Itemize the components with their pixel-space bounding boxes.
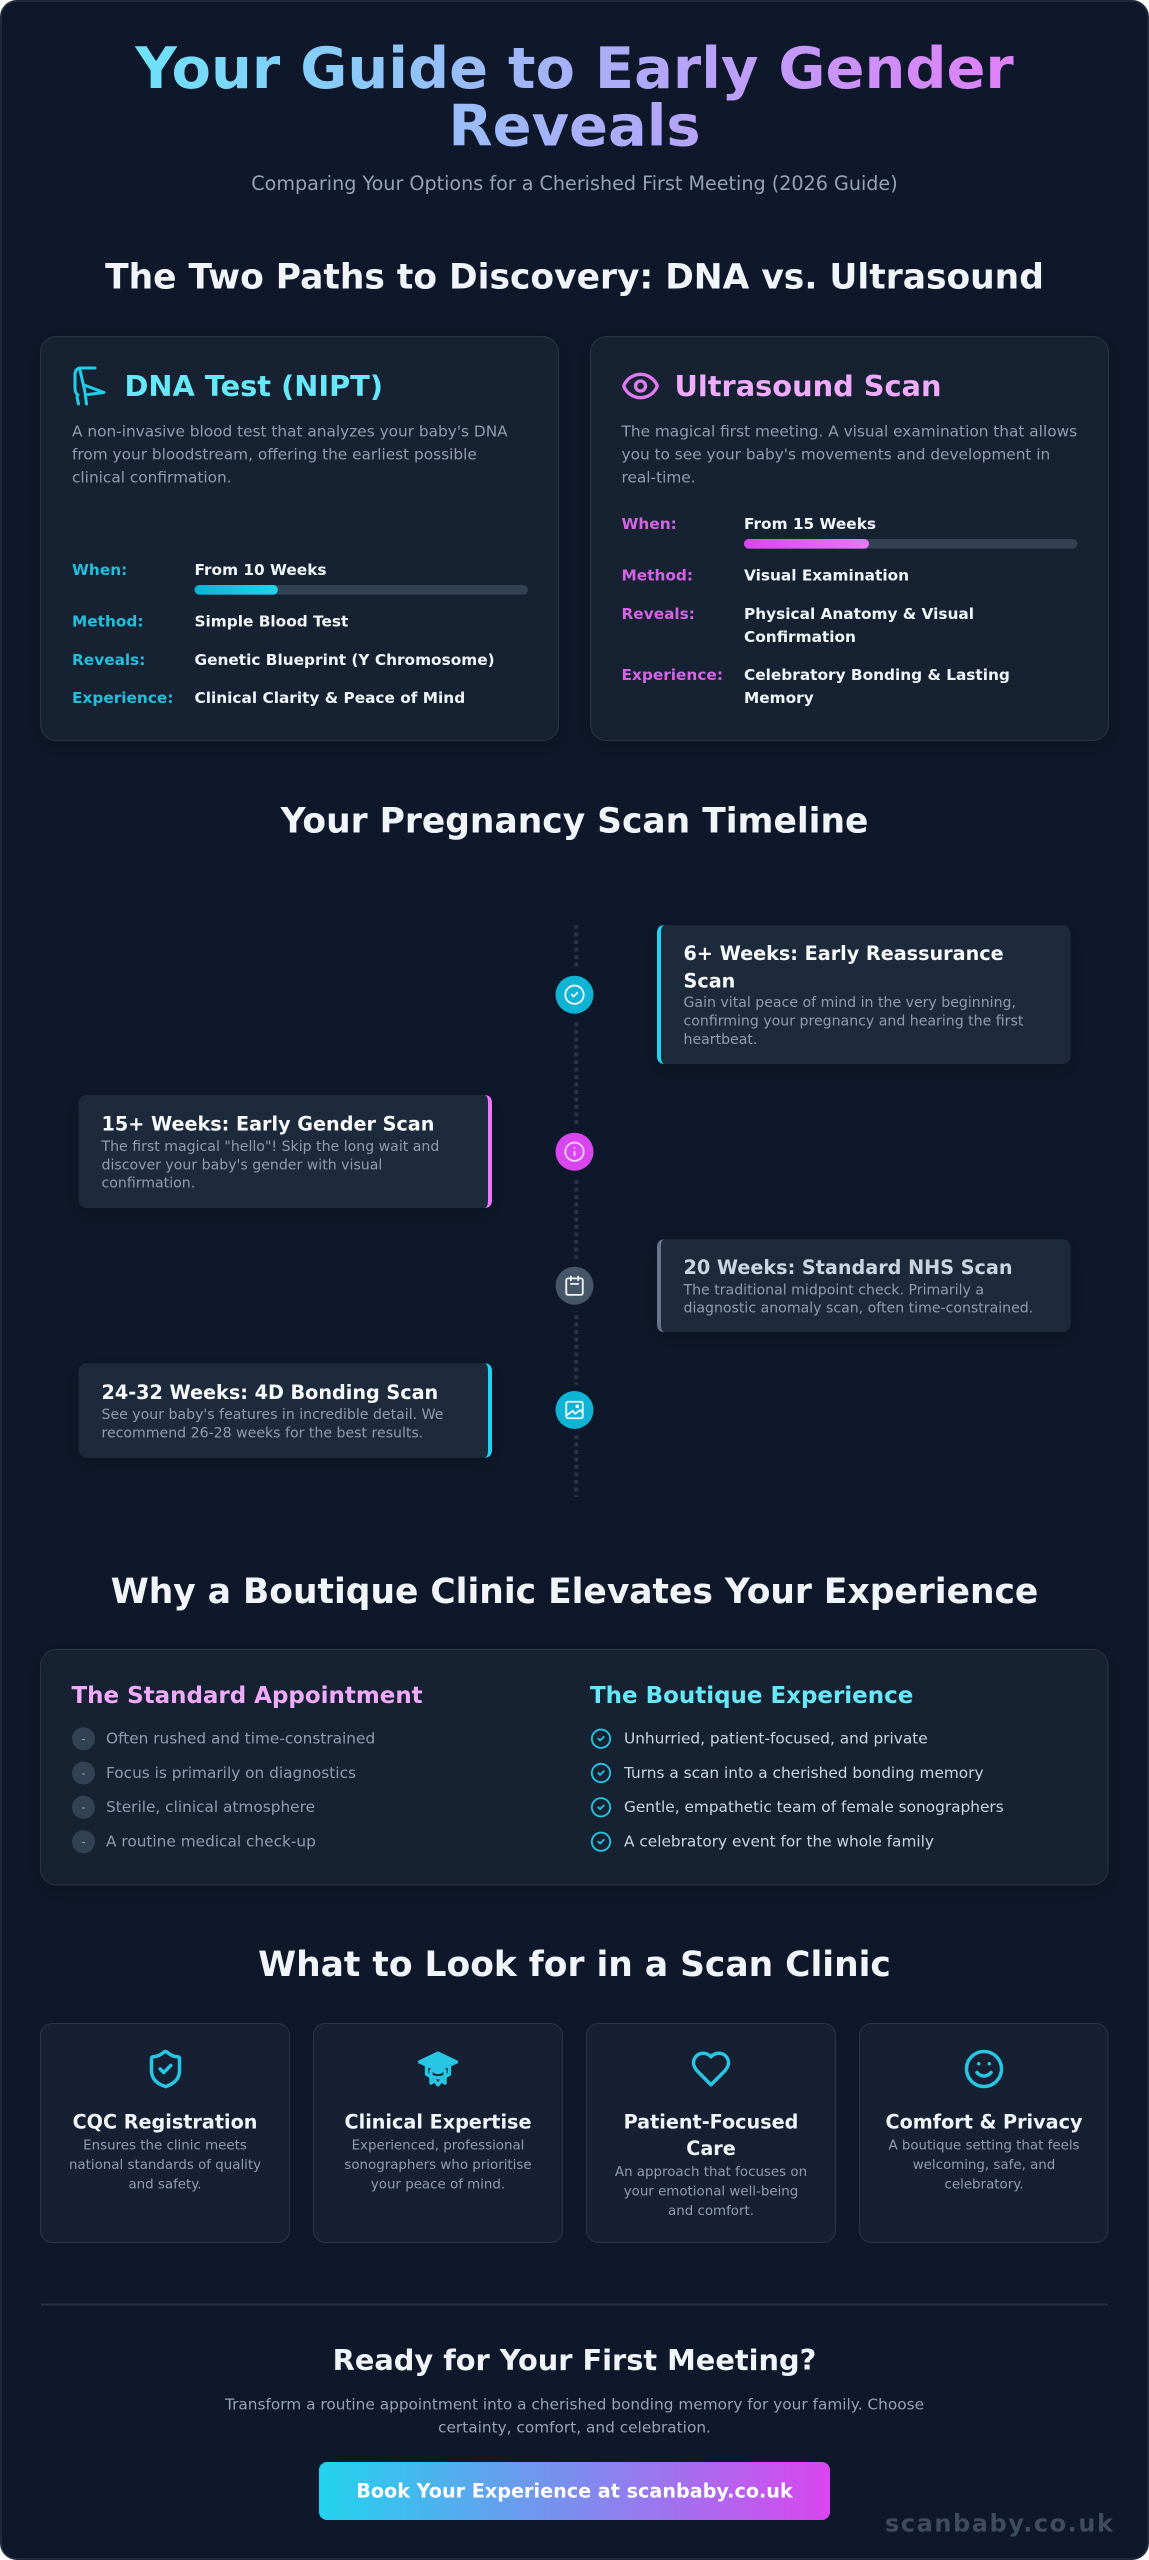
heading: boutique: Why a Boutique Clinic Elevates Your Experience — [111, 1572, 1038, 1612]
row: reveals: Reveals: — [72, 651, 145, 669]
description: from your bloodstream, offering the earliest possible — [72, 446, 477, 464]
heading: timeline: Your Pregnancy Scan Timeline — [280, 802, 868, 842]
card: clinical expertise: Clinical Expertise — [345, 2110, 531, 2133]
column: standard appointment: - — [81, 1835, 86, 1849]
description: you to see your baby's movements and development in — [622, 446, 1050, 464]
timeline axis — [574, 925, 578, 1497]
card: 6 weeks: Scan — [684, 969, 735, 992]
description: The magical first meeting. A visual examination that allows — [620, 423, 1077, 441]
row: experience — [72, 689, 465, 707]
CTA button: Book Your Experience at scanbaby.co.uk — [356, 2480, 794, 2503]
card: 4D: recommend 26-28 weeks for the best results. — [102, 1425, 423, 1441]
card: clinical expertise: sonographers who prioritise — [344, 2158, 532, 2173]
call to action — [224, 2343, 924, 2520]
row: experience: Experience: — [72, 689, 173, 707]
card: 15 weeks: 15+ Weeks: Early Gender Scan — [102, 1113, 434, 1136]
column: boutique experience — [590, 1683, 1004, 1851]
row: reveals: Physical Anatomy & Visual — [744, 605, 974, 623]
icon: smile — [966, 2052, 1002, 2086]
column: standard appointment: Sterile, clinical atmosphere — [106, 1798, 315, 1816]
card: 15 weeks: The first magical "hello"! Skip the long wait and — [100, 1139, 439, 1155]
heading: two paths: The Two Paths to Discovery: DNA vs. Ultrasound — [105, 258, 1044, 298]
row: when: When: — [72, 561, 127, 579]
card: patient-focused care — [586, 2024, 836, 2242]
panel: comparison — [40, 1650, 1108, 1885]
card: 15 weeks: confirmation. — [102, 1176, 195, 1192]
column: standard appointment: - — [81, 1732, 86, 1746]
progress bar: 10 weeks — [194, 585, 528, 595]
card: CQC: and safety. — [128, 2177, 202, 2192]
row: when: When: — [622, 515, 677, 533]
row: when — [72, 561, 327, 579]
panel: ultrasound — [590, 336, 1108, 740]
card: 15 weeks: discover your baby's gender with visual — [102, 1157, 382, 1173]
row: experience: Celebratory Bonding & Lasting — [744, 666, 1010, 684]
icon: shield — [152, 2051, 180, 2087]
column: standard appointment: - — [81, 1801, 86, 1815]
card: CQC — [40, 2024, 290, 2242]
watermark: scanbaby.co.uk — [885, 2510, 1114, 2538]
CTA text: certainty, comfort, and celebration. — [438, 2418, 711, 2436]
card: comfort and privacy: Comfort & Privacy — [886, 2110, 1083, 2133]
card: clinical expertise: your peace of mind. — [371, 2177, 505, 2192]
card: comfort and privacy: A boutique setting that feels — [888, 2138, 1080, 2153]
title: Your Guide to Early Gender — [134, 35, 1014, 102]
row: reveals: Confirmation — [744, 628, 856, 646]
icon: graduation cap — [420, 2053, 456, 2085]
card: clinical expertise: Experienced, professional — [352, 2138, 524, 2153]
marker: 15 weeks — [549, 1126, 600, 1177]
row: method — [72, 613, 348, 631]
card: 6 weeks — [657, 925, 1070, 1064]
marker: 6 weeks — [549, 969, 600, 1020]
card: 6 weeks: Gain vital peace of mind in the very beginning, — [684, 995, 1016, 1011]
chart: timeline — [78, 925, 1070, 1497]
icon: DNA — [75, 368, 104, 404]
CTA text: Transform a routine appointment into a cherished bonding memory for your family. Choose — [224, 2395, 924, 2413]
column: standard appointment: - — [81, 1766, 86, 1780]
card: 6 weeks: heartbeat. — [684, 1032, 757, 1048]
card: 20 weeks: diagnostic anomaly scan, often time-constrained. — [684, 1301, 1033, 1317]
card: 20 weeks: 20 Weeks: Standard NHS Scan — [684, 1256, 1012, 1279]
row: method: Method: — [72, 613, 144, 631]
row: experience: Experience: — [622, 666, 723, 684]
icon: heart — [694, 2053, 728, 2085]
header — [134, 35, 1014, 195]
column: standard appointment: Often rushed and time-constrained — [106, 1730, 375, 1748]
description: clinical confirmation. — [72, 468, 232, 486]
card title: Ultrasound Scan — [674, 369, 941, 403]
CTA button — [319, 2462, 830, 2520]
card: 20 weeks: The traditional midpoint check. Primarily a — [682, 1282, 984, 1298]
description: A non-invasive blood test that analyzes your baby's DNA — [72, 423, 508, 441]
column: standard appointment: The Standard Appointment — [72, 1683, 423, 1709]
row: experience: Clinical Clarity & Peace of Mind — [194, 689, 465, 707]
heading: what to look for: What to Look for in a Scan Clinic — [258, 1945, 891, 1985]
card: 6 weeks: 6+ Weeks: Early Reassurance — [684, 942, 1004, 965]
card: patient-focused care: Patient-Focused — [624, 2110, 798, 2133]
column: boutique experience: Unhurried, patient-focused, and private — [624, 1730, 928, 1748]
progress bar: 15 weeks — [744, 539, 1078, 549]
card: 4D — [78, 1363, 492, 1458]
column: boutique experience: A celebratory event for the whole family — [624, 1832, 934, 1850]
row: method — [622, 567, 909, 585]
row: when — [622, 515, 876, 533]
card: patient-focused care: and comfort. — [668, 2204, 754, 2219]
marker: 4D — [549, 1384, 600, 1436]
card: 4D: See your baby's features in incredible detail. We — [102, 1407, 443, 1423]
card: CQC: Ensures the clinic meets — [83, 2138, 247, 2153]
marker: 20 weeks — [549, 1260, 600, 1311]
row: reveals: Genetic Blueprint (Y Chromosome) — [194, 651, 495, 669]
row: method: Method: — [622, 567, 693, 585]
column: boutique experience: Gentle, empathetic team of female sonographers — [624, 1798, 1004, 1816]
card: patient-focused care: An approach that focuses on — [615, 2165, 807, 2180]
card: patient-focused care: Care — [686, 2137, 736, 2160]
row: experience: Memory — [744, 689, 814, 707]
description: real-time. — [622, 468, 696, 486]
panel: DNA test — [40, 336, 558, 740]
card: comfort and privacy: welcoming, safe, and — [913, 2158, 1055, 2173]
card: patient-focused care: your emotional well-being — [624, 2184, 798, 2200]
row: when: From 15 Weeks — [744, 515, 876, 533]
column: standard appointment — [72, 1683, 423, 1853]
CTA heading: Ready for Your First Meeting? — [333, 2343, 816, 2377]
row: method: Visual Examination — [744, 567, 909, 585]
card: 4D: 24-32 Weeks: 4D Bonding Scan — [102, 1381, 438, 1404]
card title: DNA Test (NIPT) — [124, 369, 383, 403]
subtitle: Comparing Your Options for a Cherished First Meeting (2026 Guide) — [251, 172, 898, 195]
card: comfort and privacy: celebratory. — [944, 2177, 1024, 2192]
row: method: Simple Blood Test — [194, 613, 348, 631]
row: experience — [622, 666, 1010, 707]
column: standard appointment: A routine medical check-up — [106, 1832, 316, 1850]
row: reveals — [622, 605, 974, 646]
card: 15 weeks — [78, 1095, 492, 1208]
card: clinical expertise — [314, 2024, 562, 2242]
card: 6 weeks: confirming your pregnancy and hearing the first — [684, 1014, 1024, 1030]
card: CQC: national standards of quality — [69, 2158, 261, 2173]
icon: eye — [624, 374, 657, 398]
column: boutique experience: Turns a scan into a cherished bonding memory — [623, 1764, 984, 1782]
row: reveals: Reveals: — [622, 605, 695, 623]
row: when: From 10 Weeks — [194, 561, 327, 579]
card: comfort and privacy — [860, 2024, 1108, 2242]
title: Reveals — [448, 93, 701, 160]
column: standard appointment: Focus is primarily on diagnostics — [106, 1764, 356, 1782]
card: 20 weeks — [657, 1239, 1070, 1332]
column: boutique experience: The Boutique Experience — [590, 1683, 913, 1709]
card: CQC: CQC Registration — [73, 2110, 257, 2133]
